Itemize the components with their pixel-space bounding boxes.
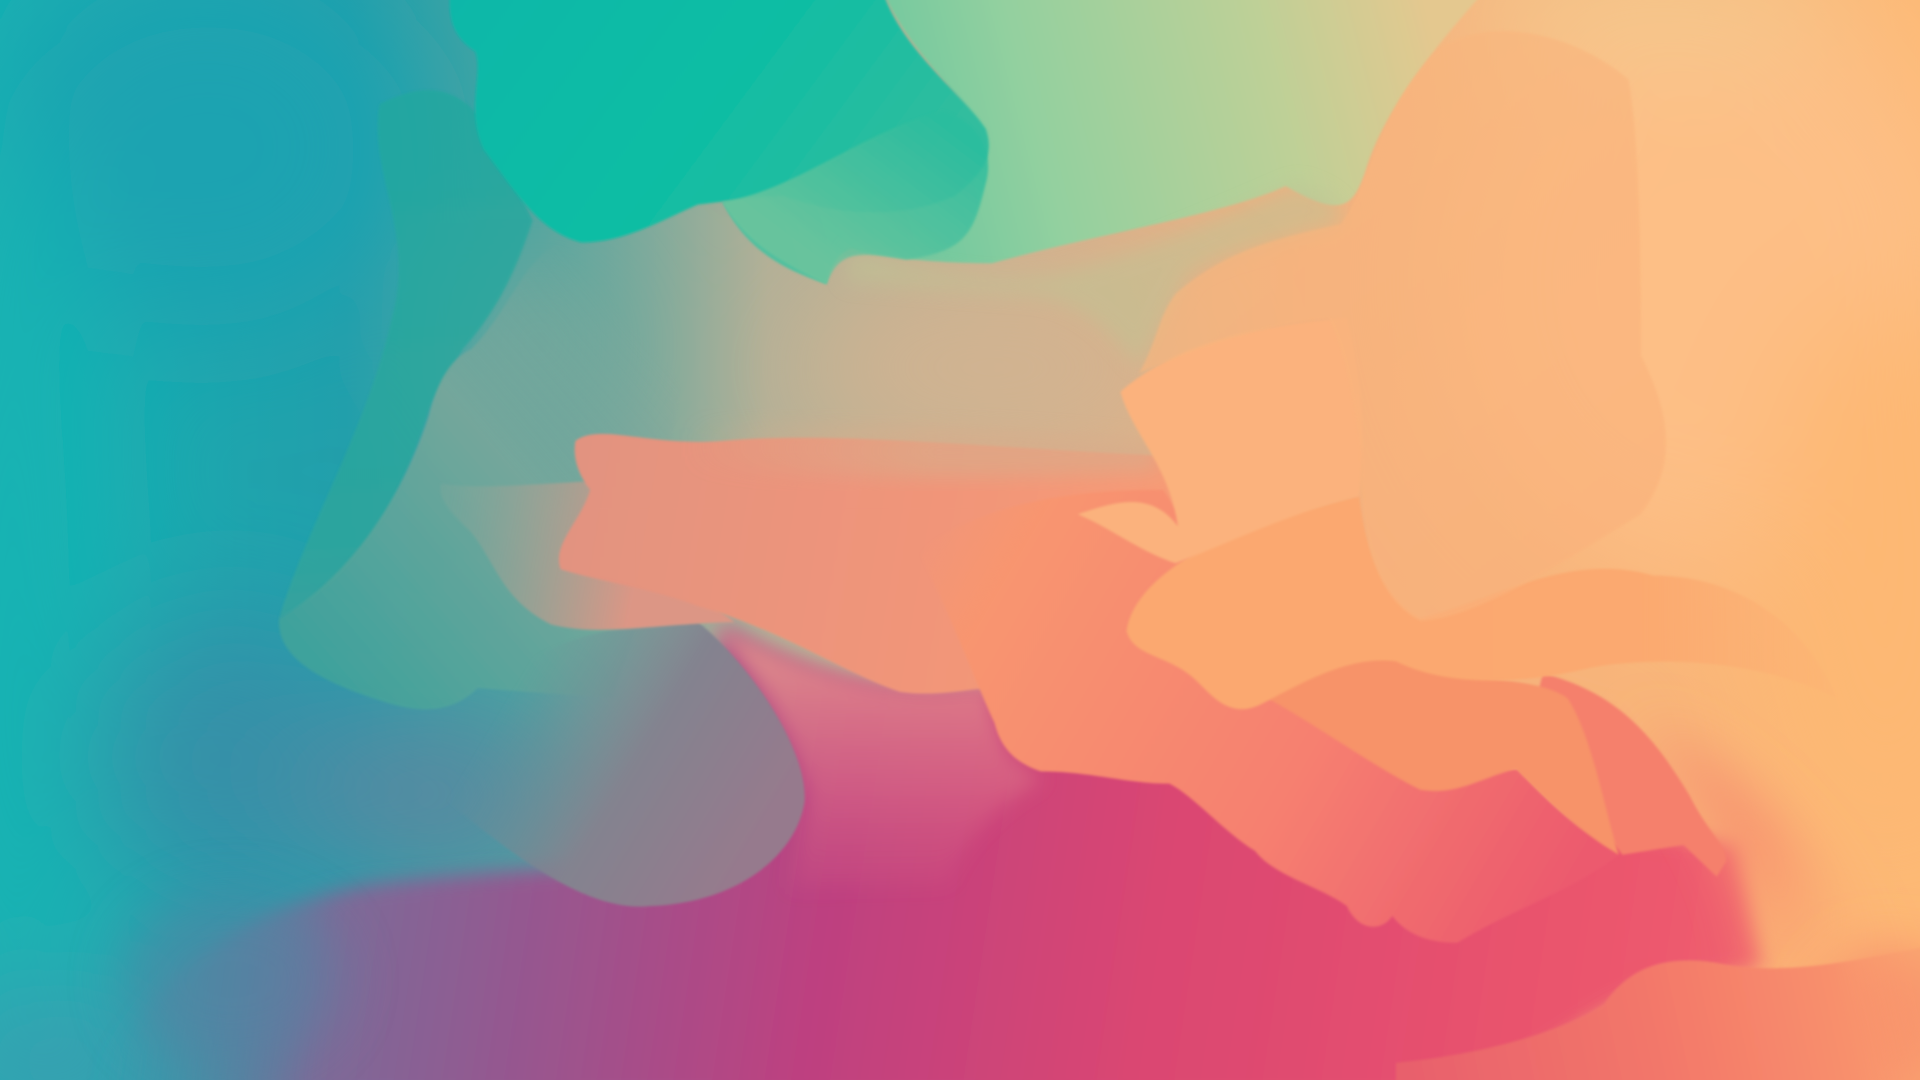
shape: salmon drape — [559, 434, 1224, 694]
shape: mauve drape — [441, 622, 805, 907]
shape: bottom right orange — [1396, 943, 1920, 1080]
shape: magenta to pink lower field — [73, 624, 1763, 1080]
shape: left teal veil — [279, 90, 533, 618]
shape: rose haze under salmon drape — [704, 618, 1043, 888]
shape: salmon top fade — [686, 422, 1157, 477]
shape: coral cascade — [918, 490, 1619, 943]
shape: peach upper cloud — [1139, 31, 1666, 621]
shape: sage drape — [279, 239, 686, 709]
shape: orange middle fold — [1267, 658, 1619, 855]
shape: teal wave top — [450, 0, 989, 242]
shape: tan band below ribbon — [845, 184, 1342, 367]
shape: light green ribbon — [722, 0, 1488, 284]
shape: bottom-left blue to purple blend — [122, 894, 343, 1065]
shape: orange lower cloud — [1127, 496, 1837, 709]
shape: lower coral fold — [1537, 673, 1727, 877]
shape: right coral ribbon — [1641, 722, 1898, 980]
shape: teal-green fold — [722, 110, 988, 284]
shape: lower right corner blend — [1818, 949, 1920, 1080]
shape: translucent salmon under drape — [441, 480, 735, 630]
shape: peach folded cloud — [1078, 318, 1362, 563]
